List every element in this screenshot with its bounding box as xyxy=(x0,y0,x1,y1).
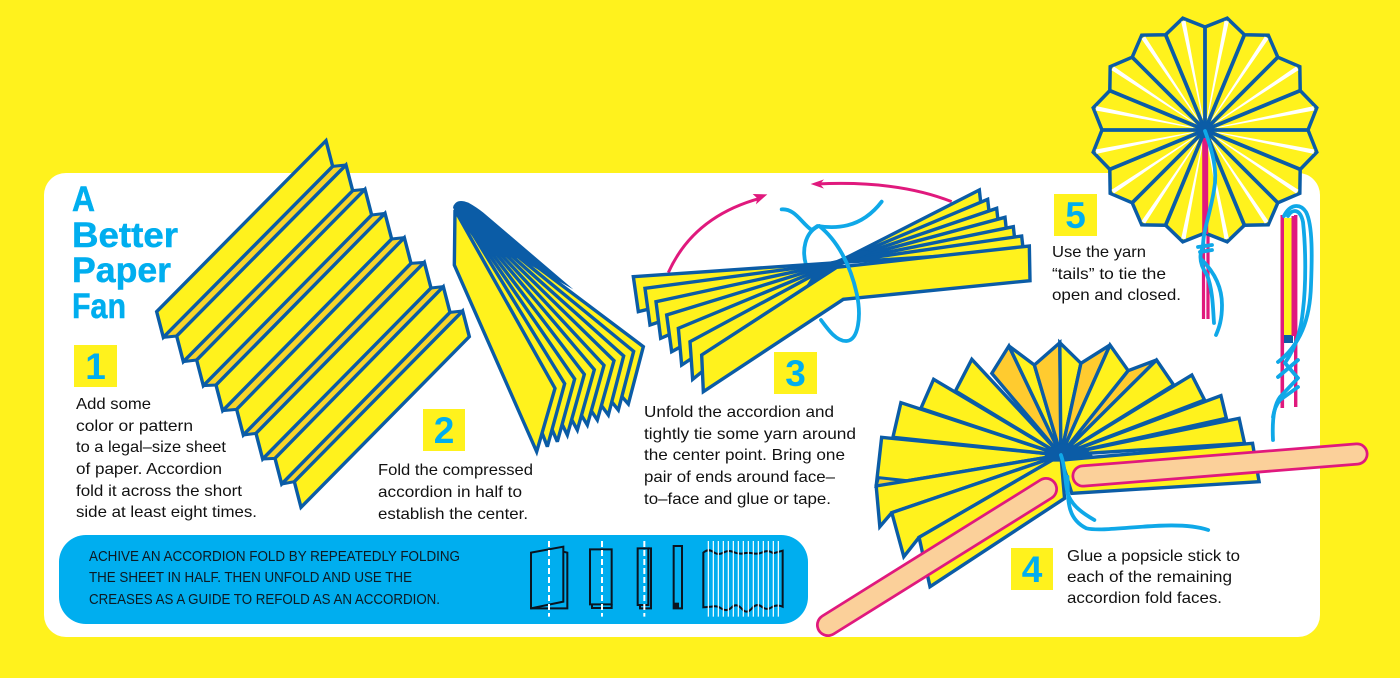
callout text: CREASES AS A GUIDE TO REFOLD AS AN ACCORDION. xyxy=(89,592,440,608)
title: Better xyxy=(72,216,178,255)
illustration: finished round fan xyxy=(1093,18,1317,335)
illustration: unfolded accordion tied with yarn xyxy=(633,179,1030,392)
illustration: opened fan with popsicle sticks xyxy=(828,343,1357,625)
step 2 number badge: 2 xyxy=(434,410,454,451)
step 4 text: accordion fold faces. xyxy=(1067,590,1222,607)
step 1 text xyxy=(76,396,257,521)
step 2 number badge xyxy=(423,409,465,451)
yarn loop in front of paper xyxy=(819,226,859,341)
step 1 text: of paper. Accordion xyxy=(76,461,222,478)
callout text: ACHIVE AN ACCORDION FOLD BY REPEATEDLY FOLDING xyxy=(89,549,460,565)
yarn tied at fan center xyxy=(1061,455,1208,530)
callout text xyxy=(89,549,460,608)
step 5 text: open and closed. xyxy=(1052,287,1181,304)
step 1 text: fold it across the short xyxy=(76,483,243,500)
yarn loop behind paper xyxy=(804,227,817,265)
icon: sheet folded in half xyxy=(531,541,567,617)
step 2 text: establish the center. xyxy=(378,506,528,523)
fan hub xyxy=(1197,122,1213,138)
step 5 number badge xyxy=(1054,194,1097,236)
blue fold spokes xyxy=(1102,27,1308,225)
step 1 number badge: 1 xyxy=(85,346,106,387)
step 4 text: each of the remaining xyxy=(1067,569,1232,586)
step 4 text: Glue a popsicle stick to xyxy=(1067,548,1240,565)
illustration: accordion folded in half xyxy=(453,201,643,452)
step 1 text: to a legal–size sheet xyxy=(76,439,227,456)
callout: accordion fold tip xyxy=(59,535,808,624)
step 4 text xyxy=(1067,548,1240,607)
handles visible through fan xyxy=(1202,130,1208,234)
round pleated fan outline xyxy=(1093,18,1317,242)
step 4 number badge: 4 xyxy=(1022,549,1043,590)
step 2 text: Fold the compressed xyxy=(378,462,533,479)
icon: folding sequence diagrams xyxy=(531,541,783,617)
yarn tails xyxy=(782,202,882,230)
step 5 text xyxy=(1052,244,1181,304)
step 3 text: to–face and glue or tape. xyxy=(644,491,831,508)
step 1 text: Add some xyxy=(76,396,151,413)
title: Fan xyxy=(72,287,126,326)
title: Paper xyxy=(72,251,171,290)
illustration: fan closed from the side xyxy=(1273,206,1312,440)
step 4 number badge xyxy=(1011,548,1053,590)
callout text: THE SHEET IN HALF. THEN UNFOLD AND USE THE xyxy=(89,570,412,586)
icon: folded in quarters xyxy=(590,541,612,617)
step 2 text: accordion in half to xyxy=(378,484,522,501)
title xyxy=(72,180,178,326)
step 3 text: the center point. Bring one xyxy=(644,447,845,464)
arrow: left end swings up xyxy=(668,194,767,273)
step 2 text xyxy=(378,462,533,523)
step 3 text: Unfold the accordion and xyxy=(644,404,834,421)
fan handles xyxy=(1204,130,1208,319)
step 5 text: Use the yarn xyxy=(1052,244,1146,261)
step 1 text: side at least eight times. xyxy=(76,504,257,521)
step 3 text: pair of ends around face– xyxy=(644,469,835,486)
step 3 number badge xyxy=(774,352,817,394)
popsicle stick: left xyxy=(828,489,1046,625)
step 1 text: color or pattern xyxy=(76,418,193,435)
icon: folded in eighths xyxy=(638,541,651,617)
step 1 number badge xyxy=(74,345,117,387)
arrow: right end swings up xyxy=(811,179,952,202)
step 5 text: “tails” to tie the xyxy=(1052,266,1166,283)
step 5 number badge: 5 xyxy=(1065,195,1086,236)
step 3 text: tightly tie some yarn around xyxy=(644,426,856,443)
step 3 text xyxy=(644,404,856,508)
white main panel xyxy=(44,173,1320,637)
icon: unfolded sheet with creases xyxy=(703,541,783,617)
icon: narrow fold xyxy=(674,546,682,608)
white crease lines xyxy=(1096,21,1314,239)
yarn and knot xyxy=(1198,131,1222,335)
step 3 number badge: 3 xyxy=(785,353,806,394)
illustration: accordion folded sheet xyxy=(157,141,469,507)
title: A xyxy=(72,180,95,219)
popsicle stick: right xyxy=(1083,454,1357,476)
yarn wrapping closed fan xyxy=(1273,206,1312,440)
fan blades xyxy=(876,343,1259,587)
